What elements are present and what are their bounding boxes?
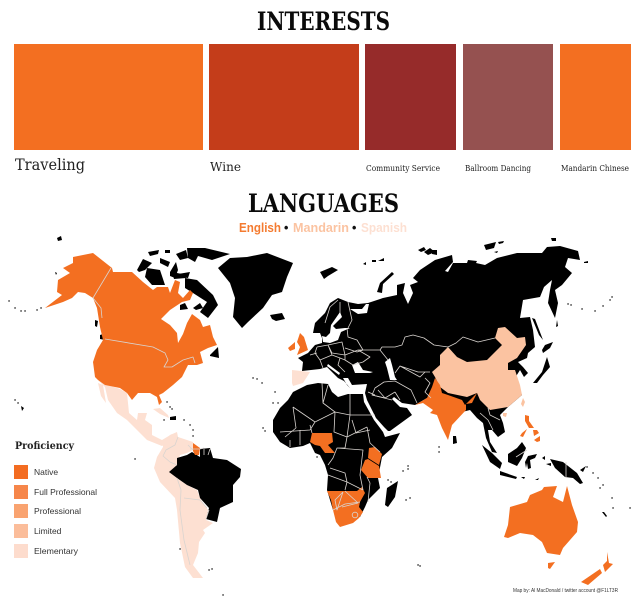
country: india, pakistan, bangladesh [415,378,477,440]
interest labels [15,155,629,174]
country borders [93,268,566,565]
key: english: English [239,221,281,235]
label: mandarin chinese: Mandarin Chinese [561,164,629,173]
swatch: mandarin chinese [560,44,631,150]
world map [9,236,630,595]
legend item: professional: Professional [34,506,81,516]
key: spanish: Spanish [361,221,407,235]
small black islands [21,236,607,517]
country: united kingdom and ireland [288,333,308,355]
adriatic sea [327,364,340,375]
legend item: full professional: Full Professional [34,487,97,497]
country: china [432,327,526,417]
region: arctic and small islands [21,236,607,517]
region: south america [154,432,213,578]
legend item: elementary: Elementary [34,546,79,556]
region: southeast asia [482,442,586,484]
sakhalin and japan [532,318,558,383]
iceland [270,313,285,321]
country: brazil and guianas [169,448,241,522]
region: mexico and central america [98,380,172,446]
swatch: traveling [14,44,203,150]
white sea [350,304,369,314]
panel: interest treemap [14,44,631,150]
label: traveling: Traveling [15,155,85,174]
label: community service: Community Service [366,164,440,173]
dots: small islands [9,297,630,595]
baltic sea [322,312,350,343]
country: australia [504,486,578,555]
country: nigeria and cameroon [310,433,335,453]
language key: • [284,221,288,235]
label: ballroom dancing: Ballroom Dancing [465,164,531,173]
country: spain [292,370,310,386]
title: languages: LANGUAGES [248,189,399,218]
black sea [352,362,373,373]
key: mandarin: Mandarin [293,221,349,235]
region: eurasia [298,246,580,453]
country: new zealand [581,552,613,585]
country: guyana [193,443,200,455]
region: philippines [520,415,540,442]
map credit: Map by: Al MacDonald / twitter account @F1LT3R [513,588,618,594]
greenland [218,253,293,328]
legend item: limited: Limited [34,526,62,536]
legend item: native: Native [34,467,58,477]
swatch: ballroom dancing [463,44,553,150]
swatch: community service [365,44,456,150]
country: kenya and tanzania [361,447,382,478]
title: interests: INTERESTS [257,7,390,36]
caspian sea [385,358,397,380]
tasmania [548,562,555,569]
region: africa [273,383,400,517]
language key: • [352,221,356,235]
language key [239,221,407,235]
region: north america [45,253,217,405]
region: southern africa [327,487,365,527]
seas: baltic, black sea, caspian [322,304,397,380]
label: wine: Wine [210,159,241,174]
legend title: Proficiency [15,440,75,452]
canadian arctic [137,248,230,358]
swatch: wine [209,44,359,150]
legend: proficiency [14,440,97,558]
eurasian arctic islands [320,238,588,293]
